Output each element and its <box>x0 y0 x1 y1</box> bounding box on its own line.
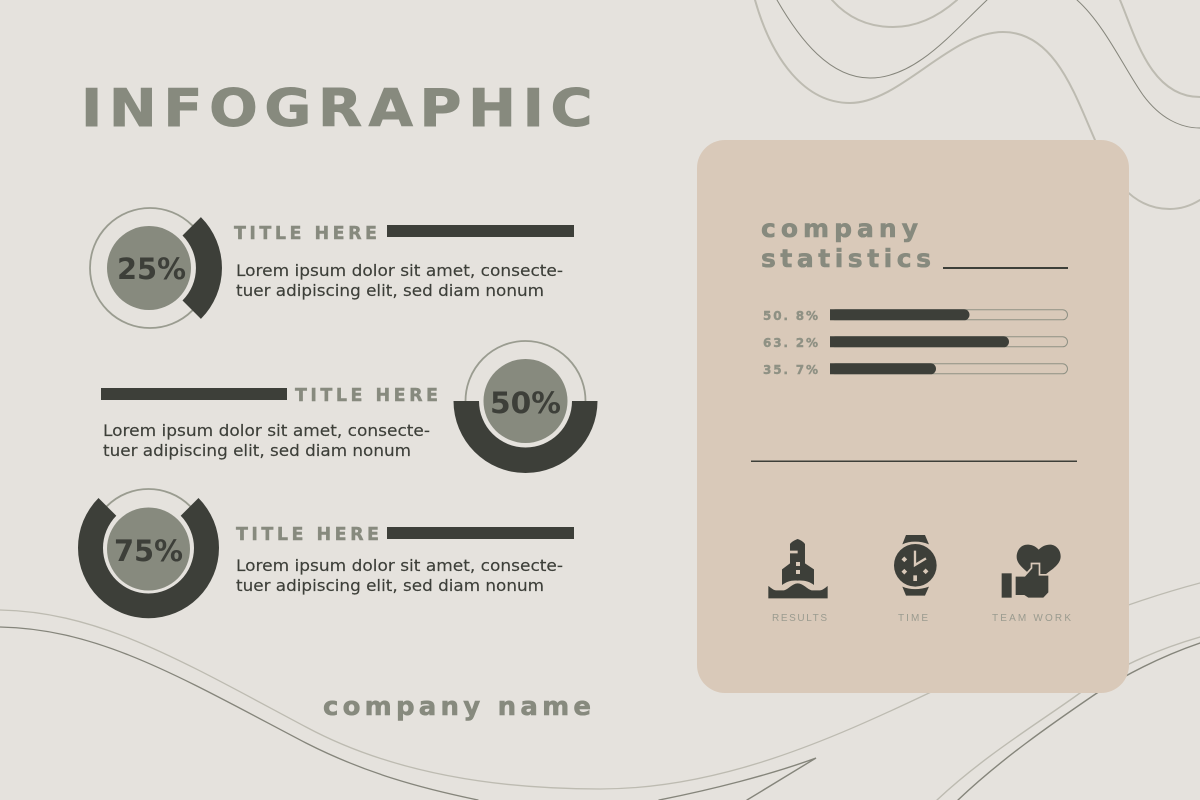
row 1 text <box>234 224 574 300</box>
panel heading: statistics <box>761 244 931 273</box>
panel heading: company <box>761 214 918 243</box>
icon: thumbs up and heart <box>1002 545 1061 598</box>
row 2 text <box>101 386 438 460</box>
row 1 text: tuer adipiscing elit, sed diam nonum <box>236 281 544 300</box>
progress bars: 50. 8% <box>763 309 818 323</box>
donut: 50% <box>454 341 598 473</box>
row 3 text: tuer adipiscing elit, sed diam nonum <box>236 576 544 595</box>
company name: company name <box>323 692 591 722</box>
row 1 text: TITLE HERE <box>234 224 377 244</box>
row 2 text: TITLE HERE <box>295 386 438 406</box>
icon: rocket <box>768 539 828 598</box>
icon: watch <box>894 535 937 596</box>
icon labels: RESULTS <box>772 613 827 624</box>
progress bars <box>763 309 1068 377</box>
row 3 text <box>236 525 574 595</box>
donut: 25% <box>90 208 222 328</box>
donut: 75% <box>78 489 219 618</box>
title: INFOGRAPHIC <box>81 77 593 138</box>
panel: company statistics <box>697 140 1129 693</box>
progress bars: 63. 2% <box>763 336 818 350</box>
donut: 50%: 50% <box>490 386 561 420</box>
icon labels <box>772 613 1071 624</box>
progress bars: 35. 7% <box>763 363 818 377</box>
icon labels: TIME <box>898 613 928 624</box>
row 2 text: tuer adipiscing elit, sed diam nonum <box>103 441 411 460</box>
row 1 text: Lorem ipsum dolor sit amet, consecte- <box>236 261 563 280</box>
row 2 text: Lorem ipsum dolor sit amet, consecte- <box>103 421 430 440</box>
panel heading <box>761 214 1068 273</box>
row 3 text: Lorem ipsum dolor sit amet, consecte- <box>236 556 563 575</box>
donut: 75%: 75% <box>114 534 183 568</box>
donut: 25%: 25% <box>117 252 186 286</box>
icon labels: TEAM WORK <box>992 613 1071 624</box>
row 3 text: TITLE HERE <box>236 525 379 545</box>
